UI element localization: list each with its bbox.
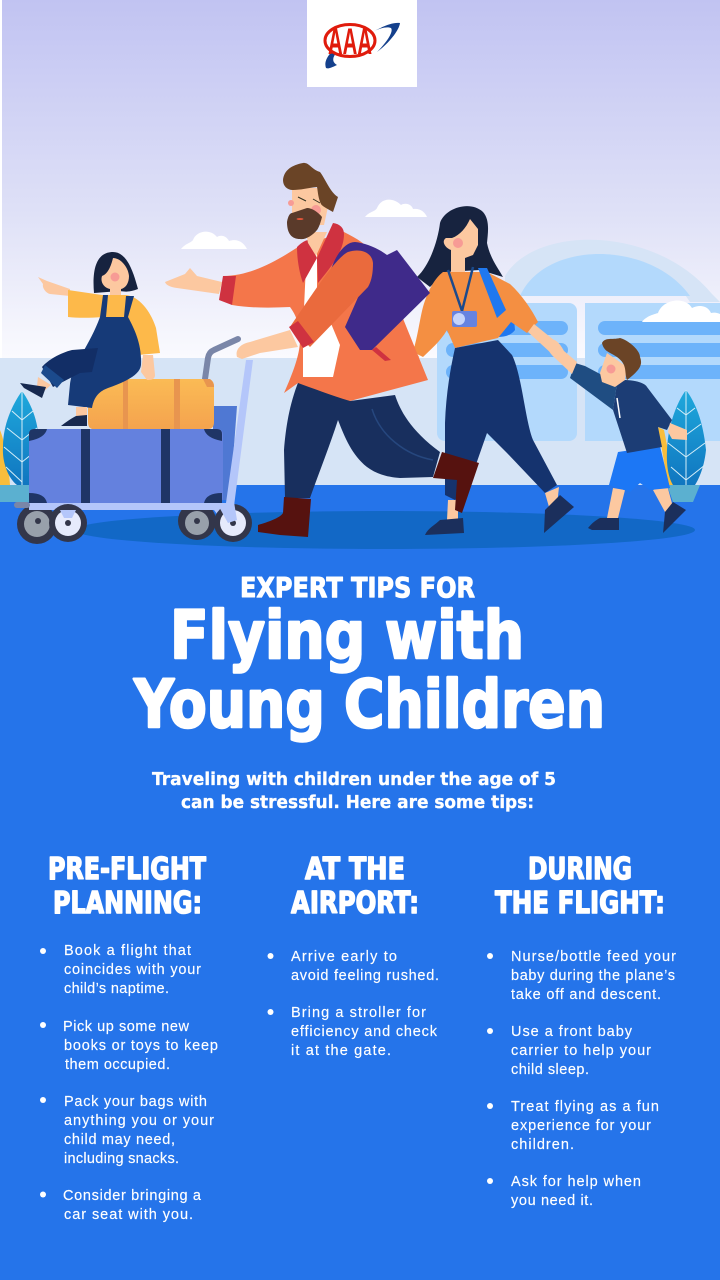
backpack strap xyxy=(478,268,506,318)
page margin strip xyxy=(0,0,2,358)
tips list xyxy=(40,943,218,1223)
overalls xyxy=(68,295,141,408)
face xyxy=(292,188,328,225)
column: during the flight xyxy=(487,852,676,1209)
tips list: Pack your bags with xyxy=(64,1094,207,1110)
sleeve xyxy=(290,250,373,347)
hand xyxy=(165,268,222,294)
lanyard xyxy=(448,267,473,311)
tips list: experience for your xyxy=(511,1118,651,1134)
tips list: carrier to help your xyxy=(511,1043,651,1059)
intro text: Traveling with children under the age of 5 xyxy=(152,769,556,790)
heading: AIRPORT: xyxy=(291,886,419,921)
main heading line two: Young Children xyxy=(133,666,605,743)
woman holding hands xyxy=(412,206,574,535)
cart handle grey xyxy=(205,339,238,379)
eyebrow heading: EXPERT TIPS FOR xyxy=(240,571,475,604)
shoes xyxy=(425,518,464,535)
girl sitting on luggage xyxy=(20,252,160,426)
column: at the airport xyxy=(268,852,439,1059)
hand xyxy=(668,423,687,440)
tips list: take off and descent. xyxy=(511,987,661,1003)
luggage cart xyxy=(14,339,253,544)
tips list: efficiency and check xyxy=(291,1024,438,1040)
right forearm xyxy=(141,355,155,380)
eyes xyxy=(298,197,320,203)
ground shadow xyxy=(75,511,695,549)
pants xyxy=(284,373,440,498)
pants xyxy=(445,340,557,500)
joined hands and arm xyxy=(548,339,577,374)
face xyxy=(101,258,129,297)
tips list: Pick up some new xyxy=(63,1019,190,1035)
face xyxy=(600,353,627,387)
rear panel xyxy=(213,406,237,500)
tips list: child sleep. xyxy=(511,1062,589,1078)
tips list: children. xyxy=(511,1137,574,1153)
tips list: Book a flight that xyxy=(64,943,191,959)
tips list: Ask for help when xyxy=(511,1174,641,1190)
leg xyxy=(42,348,98,387)
skin legs xyxy=(447,487,559,520)
shoe raised xyxy=(20,383,46,398)
shorts xyxy=(609,446,670,492)
plant left xyxy=(0,391,38,502)
orange duffel bag xyxy=(88,379,214,429)
cuffs xyxy=(219,276,314,348)
coat xyxy=(223,232,428,401)
legs xyxy=(607,485,673,518)
hair xyxy=(283,163,338,212)
beard xyxy=(287,208,322,239)
pointing arm xyxy=(38,277,70,296)
heading: PRE-FLIGHT xyxy=(48,852,206,887)
logo oval: AAA xyxy=(328,21,372,62)
backpack xyxy=(330,242,430,350)
airport building xyxy=(437,240,720,441)
horizon band xyxy=(0,358,720,486)
tips list xyxy=(487,949,676,1209)
tips list: including snacks. xyxy=(64,1151,179,1167)
tips list: you need it. xyxy=(511,1193,593,1209)
hoodie string xyxy=(617,398,620,418)
face and neck xyxy=(444,219,478,272)
arm to boy xyxy=(528,324,560,354)
tips list: Treat flying as a fun xyxy=(511,1099,659,1115)
front wheels xyxy=(49,504,252,542)
boots xyxy=(258,497,311,537)
hair xyxy=(94,252,138,293)
heading: THE FLIGHT: xyxy=(495,886,665,921)
tips list: it at the gate. xyxy=(291,1043,391,1059)
tips list: books or toys to keep xyxy=(64,1038,218,1054)
hoodie xyxy=(613,380,672,453)
hoodie arm xyxy=(570,363,617,410)
tips list: them occupied. xyxy=(65,1057,170,1073)
heading: DURING xyxy=(528,852,632,887)
boy xyxy=(548,338,687,533)
title xyxy=(133,571,605,743)
tips list: Consider bringing a xyxy=(63,1188,202,1204)
heading xyxy=(48,852,206,921)
tips list: avoid feeling rushed. xyxy=(291,968,439,984)
tips list: Nurse/bottle feed your xyxy=(511,949,676,965)
mouth xyxy=(296,218,304,220)
background sky xyxy=(2,0,720,358)
man with backpack xyxy=(165,163,479,537)
tips list: Bring a stroller for xyxy=(291,1005,426,1021)
main heading line one: Flying with xyxy=(170,597,524,674)
tips list: child may need, xyxy=(64,1132,175,1148)
heading: AT THE xyxy=(305,852,405,887)
logo swoosh xyxy=(325,23,400,68)
heading xyxy=(495,852,665,921)
white shirt xyxy=(303,243,340,377)
tips list: coincides with your xyxy=(64,962,201,978)
neck xyxy=(306,232,327,256)
arm xyxy=(237,330,298,359)
heading xyxy=(291,852,419,921)
tips list: Use a front baby xyxy=(511,1024,633,1040)
logo panel xyxy=(307,0,417,87)
cart frame xyxy=(29,360,253,528)
ground xyxy=(0,485,720,1280)
camera xyxy=(452,311,477,327)
clouds xyxy=(181,200,427,249)
column: pre-flight planning xyxy=(40,852,218,1223)
intro text: can be stressful. Here are some tips: xyxy=(181,792,534,813)
backpack xyxy=(495,308,515,337)
rear wheels xyxy=(17,502,216,544)
shoes xyxy=(588,518,619,530)
scarf xyxy=(297,223,344,283)
hair xyxy=(602,338,641,380)
plant right xyxy=(658,390,706,502)
long hair xyxy=(417,206,503,287)
suitcase xyxy=(29,429,223,503)
intro text xyxy=(152,769,556,813)
yellow shirt xyxy=(68,290,160,355)
tips list xyxy=(268,949,439,1059)
tips list: car seat with you. xyxy=(64,1207,193,1223)
tips list: anything you or your xyxy=(64,1113,214,1129)
heading: PLANNING: xyxy=(53,886,202,921)
lower foot xyxy=(76,407,87,416)
sweater xyxy=(413,272,538,357)
tips list: baby during the plane’s xyxy=(511,968,675,984)
tips list: child’s naptime. xyxy=(64,981,169,997)
tips list: Arrive early to xyxy=(291,949,397,965)
